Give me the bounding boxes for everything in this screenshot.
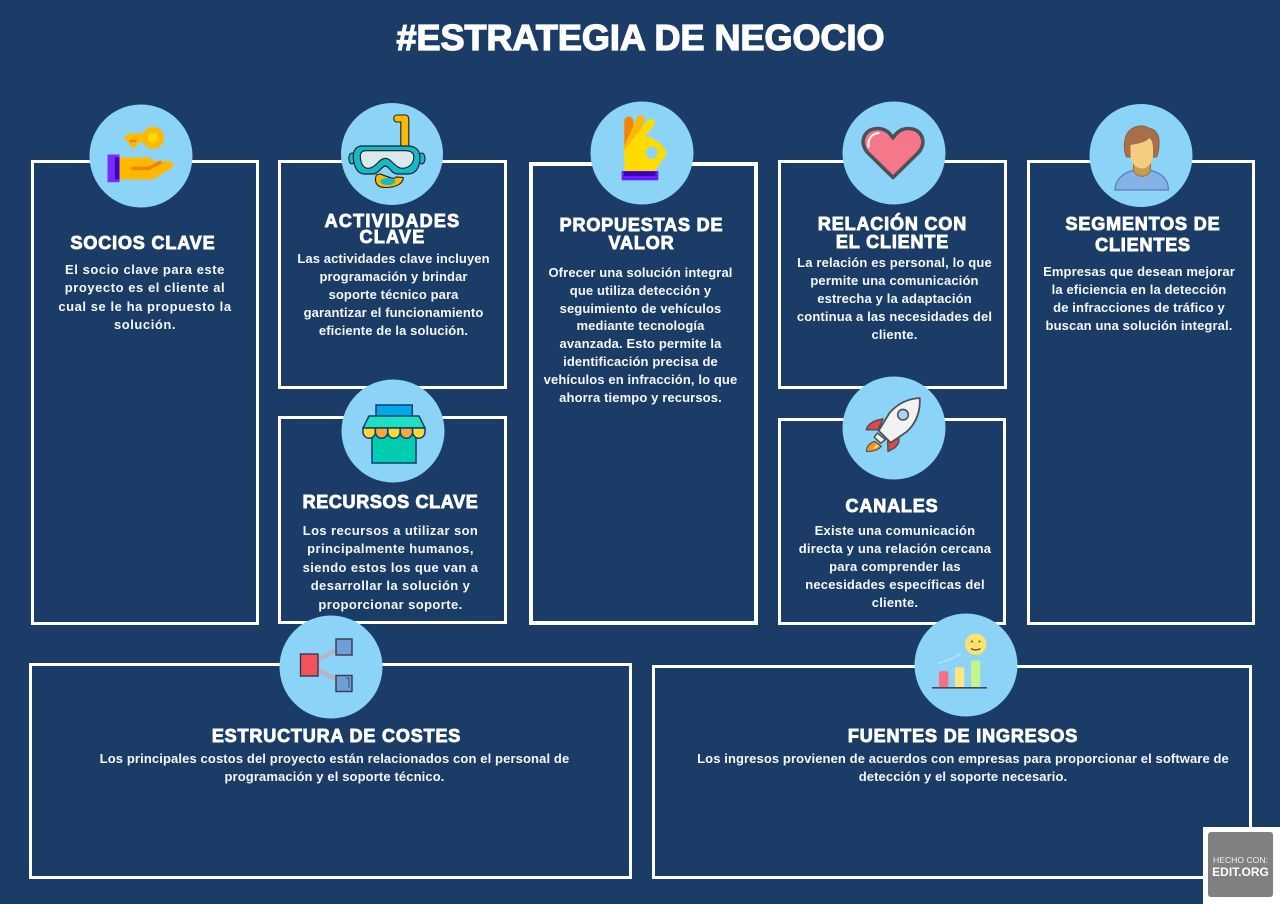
text: segmentos de clientes: de infracciones de tráfico y	[1053, 300, 1225, 315]
heading: estructura de costes: ESTRUCTURA DE COSTES	[212, 726, 461, 746]
icon: person	[1090, 104, 1192, 207]
panel: propuestas de valor	[529, 162, 758, 625]
heading: fuentes de ingresos: FUENTES DE INGRESOS	[848, 726, 1078, 746]
heading: canales: CANALES	[846, 496, 938, 516]
text: fuentes de ingresos	[697, 751, 1229, 784]
icon: ok hand	[590, 102, 694, 204]
text: propuestas de valor: avanzada. Esto permite la	[560, 336, 721, 351]
heading: segmentos de clientes	[1066, 214, 1220, 255]
icon: snorkel mask	[341, 103, 443, 205]
text: propuestas de valor: vehículos en infracción, lo que	[544, 372, 737, 387]
heading: propuestas de valor: PROPUESTAS DE	[560, 215, 723, 235]
panel: canales	[778, 418, 1006, 625]
text: canales: directa y una relación cercana	[799, 541, 991, 556]
icon: shop	[342, 380, 444, 482]
text: propuestas de valor: que utiliza detección y	[570, 283, 711, 298]
text: socios clave: cual se le ha propuesto la	[58, 299, 232, 314]
text: canales	[799, 522, 992, 610]
heading: propuestas de valor: VALOR	[609, 233, 674, 253]
text: actividades clave	[297, 250, 490, 338]
text: relación con el cliente: continua a las necesidades del	[797, 309, 992, 324]
heading: propuestas de valor	[560, 215, 723, 253]
icon: income chart	[914, 614, 1018, 716]
heading: recursos clave: RECURSOS CLAVE	[303, 492, 478, 512]
watermark: hecho con edit.org: HECHO CON:	[1213, 855, 1268, 865]
watermark: hecho con edit.org	[1203, 827, 1280, 904]
panel: estructura de costes	[29, 663, 632, 879]
text: canales: Existe una comunicación	[815, 522, 975, 538]
text: fuentes de ingresos: detección y el soporte necesario.	[859, 769, 1067, 784]
watermark: hecho con edit.org: EDIT.ORG	[1212, 865, 1269, 879]
text: actividades clave: eficiente de la solución.	[319, 323, 468, 338]
text: socios clave: El socio clave para este	[65, 262, 225, 277]
text: relación con el cliente: permite una comunicación	[810, 273, 979, 288]
heading: segmentos de clientes: SEGMENTOS DE	[1066, 214, 1220, 234]
text: recursos clave	[303, 523, 478, 612]
text: propuestas de valor	[544, 265, 737, 405]
text: canales: necesidades específicas del	[805, 577, 985, 592]
text: estructura de costes: programación y el soporte técnico.	[224, 769, 445, 784]
text: recursos clave: proporcionar soporte.	[318, 597, 463, 612]
title: #ESTRATEGIA DE NEGOCIO	[396, 17, 885, 58]
text: propuestas de valor: seguimiento de vehículos	[560, 301, 721, 316]
text: socios clave	[58, 262, 232, 332]
text: actividades clave: garantizar el funcionamiento	[304, 305, 483, 320]
panel: relación con el cliente	[778, 160, 1007, 389]
heading: actividades clave	[324, 211, 460, 247]
text: socios clave: solución.	[114, 317, 176, 332]
icon: heart	[842, 102, 946, 204]
text: actividades clave: Las actividades clave incluyen	[297, 250, 490, 266]
text: propuestas de valor: identificación precisa de	[563, 354, 718, 369]
text: recursos clave: Los recursos a utilizar son	[303, 523, 478, 538]
text: relación con el cliente: La relación es personal, lo que	[797, 254, 992, 270]
text: actividades clave: programación y brindar	[319, 269, 468, 284]
panel: socios clave	[31, 160, 259, 625]
text: recursos clave: desarrollar la solución y	[311, 578, 470, 593]
panel: segmentos de clientes	[1027, 160, 1255, 625]
icon: cost structure diagram	[280, 616, 382, 718]
text: fuentes de ingresos: Los ingresos provienen de acuerdos con empresas para proporcionar el software de	[697, 751, 1229, 766]
text: relación con el cliente	[797, 254, 992, 342]
text: segmentos de clientes: buscan una solución integral.	[1046, 318, 1232, 333]
panel: actividades clave	[278, 160, 507, 389]
text: estructura de costes: Los principales costos del proyecto están relacionados con el personal de	[100, 751, 569, 766]
text: relación con el cliente: estrecha y la adaptación	[817, 291, 972, 306]
text: segmentos de clientes: la eficiencia en la detección	[1052, 282, 1226, 297]
text: propuestas de valor: Ofrecer una solución integral	[548, 265, 733, 280]
text: relación con el cliente: cliente.	[872, 327, 918, 342]
text: propuestas de valor: mediante tecnología	[576, 318, 704, 333]
text: socios clave: proyecto es el cliente al	[65, 280, 225, 295]
heading: relación con el cliente: RELACIÓN CON	[818, 214, 967, 234]
icon: rocket	[842, 376, 946, 480]
text: recursos clave: siendo estos los que van a	[303, 560, 478, 575]
text: canales: cliente.	[872, 595, 918, 610]
heading: relación con el cliente: EL CLIENTE	[836, 232, 949, 252]
heading: socios clave: SOCIOS CLAVE	[71, 233, 215, 253]
text: estructura de costes	[100, 751, 569, 784]
heading: actividades clave: CLAVE	[360, 227, 425, 247]
panel: recursos clave	[278, 416, 507, 624]
text: segmentos de clientes: Empresas que desean mejorar	[1043, 264, 1235, 278]
text: propuestas de valor: ahorra tiempo y recursos.	[559, 390, 722, 405]
text: segmentos de clientes	[1043, 264, 1235, 333]
heading: actividades clave: ACTIVIDADES	[325, 211, 460, 231]
panel: fuentes de ingresos	[652, 665, 1252, 879]
text: actividades clave: soporte técnico para	[329, 287, 458, 302]
icon: hand with key	[90, 104, 192, 208]
heading: segmentos de clientes: CLIENTES	[1095, 235, 1191, 255]
text: recursos clave: principalmente humanos,	[307, 541, 474, 556]
heading: relación con el cliente	[818, 212, 967, 252]
text: canales: para comprender las	[829, 559, 961, 574]
